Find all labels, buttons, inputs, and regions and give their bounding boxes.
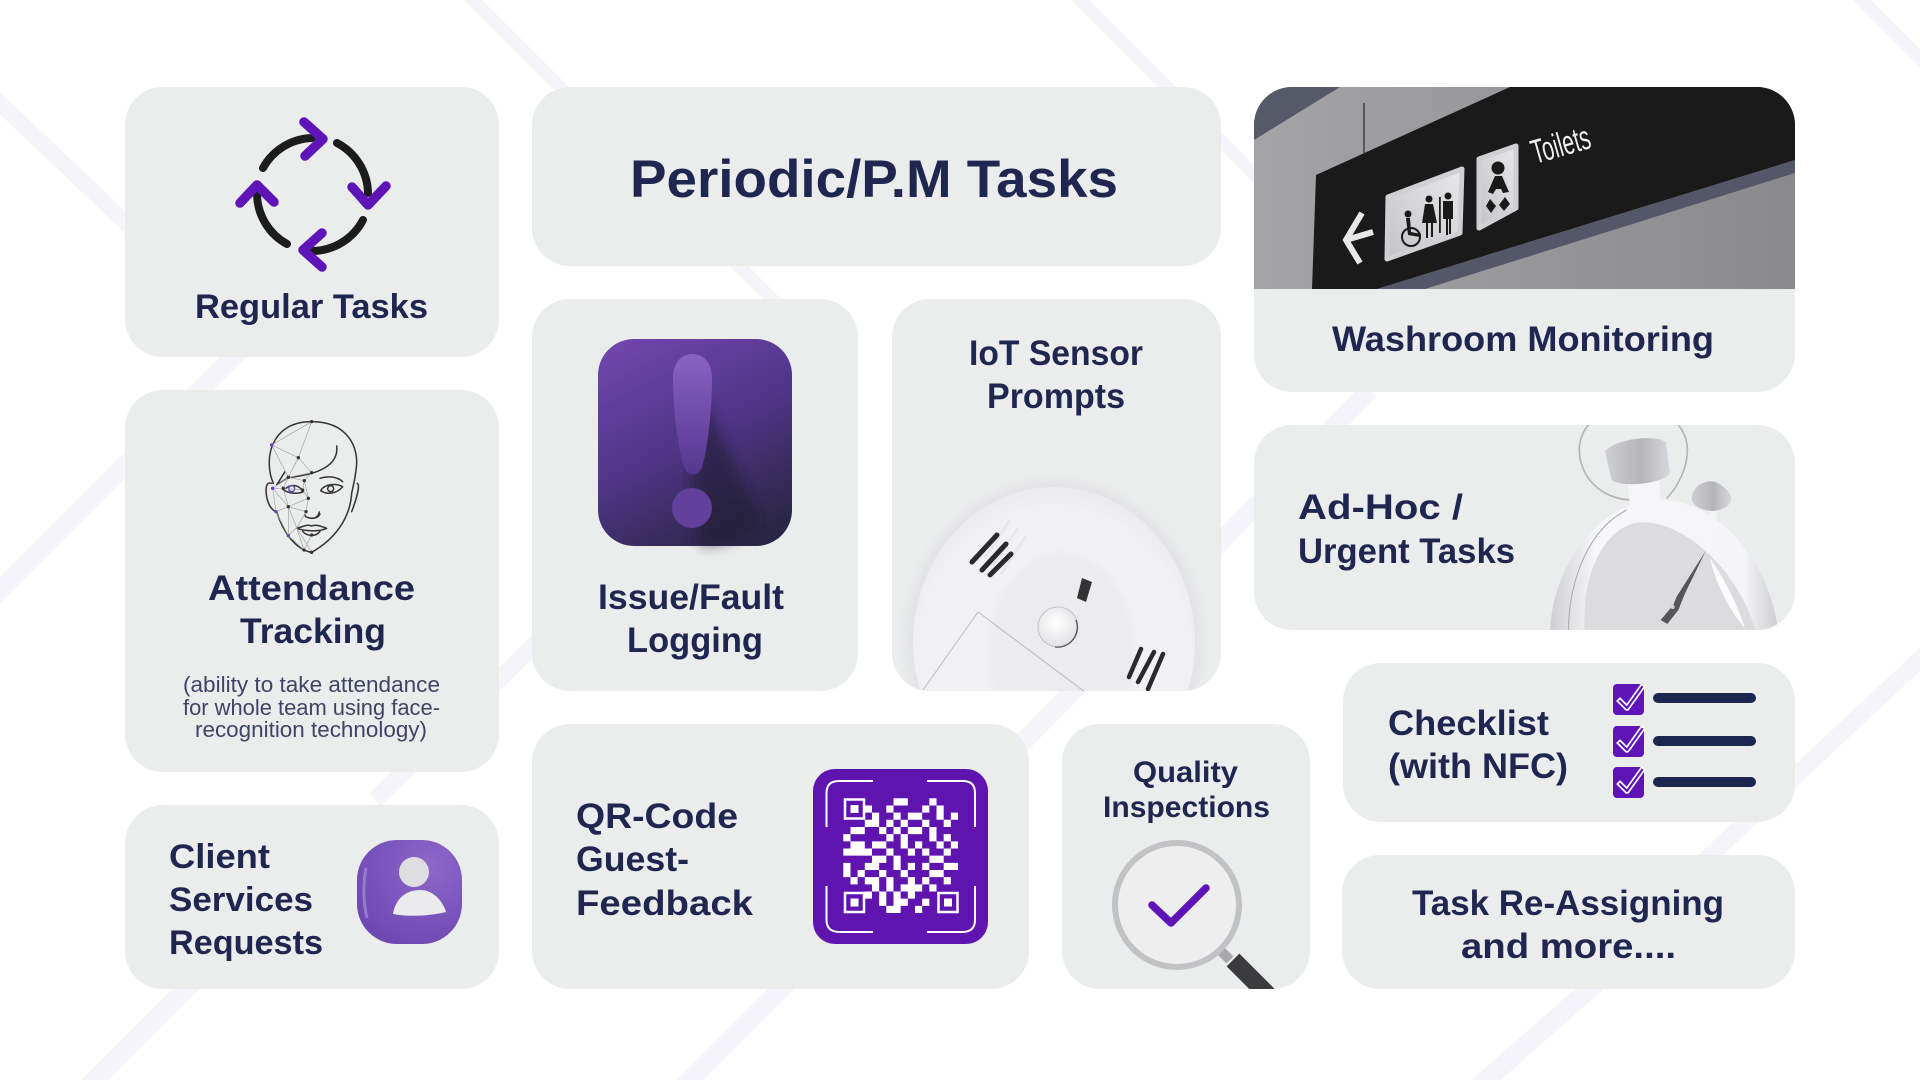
panel: Issue/Fault Logging: [532, 299, 858, 691]
heading: Issue/Fault Logging: Logging: [627, 621, 763, 660]
heading: Ad-Hoc / Urgent Tasks: Ad-Hoc /: [1298, 488, 1463, 527]
text: Task Re-Assigning and more: [1412, 884, 1724, 966]
icon: magnifier with check: [1115, 843, 1268, 995]
heading: IoT Sensor Prompts: [969, 334, 1143, 416]
heading: Washroom Monitoring: Washroom Monitoring: [1332, 320, 1714, 359]
text: QR-Code Guest-Feedback: Feedback: [576, 884, 754, 923]
text: attendance description: for whole team using face-: [183, 695, 440, 720]
panel: Client Services Requests: [125, 805, 499, 989]
heading: Quality Inspections: Quality: [1133, 756, 1238, 789]
heading: Attendance Tracking: Tracking: [240, 612, 386, 651]
heading: Issue/Fault Logging: Issue/Fault: [598, 578, 784, 617]
panel: Washroom Monitoring: [1254, 87, 1795, 392]
heading: Ad-Hoc / Urgent Tasks: [1298, 488, 1515, 571]
text: Task Re-Assigning and more: and more....: [1461, 927, 1676, 966]
heading: Quality Inspections: [1103, 756, 1270, 824]
panel: Quality Inspections: [1062, 724, 1310, 995]
text: QR-Code Guest-Feedback: QR-Code: [576, 797, 738, 836]
photo: toilets sign: [1254, 87, 1795, 289]
icon: checklist: [1613, 684, 1756, 798]
text: attendance description: [183, 672, 440, 742]
panel: Regular Tasks: [125, 87, 499, 357]
panel: Ad-Hoc / Urgent Tasks: [1254, 425, 1795, 630]
heading: IoT Sensor Prompts: IoT Sensor: [969, 334, 1143, 373]
text: Client Services Requests: Client: [169, 838, 270, 876]
heading: Issue/Fault Logging: [598, 578, 784, 660]
icon: accessible, women, men panel: [1387, 169, 1462, 259]
icon: exclamation badge: [598, 339, 792, 546]
text: Client Services Requests: Requests: [169, 924, 323, 962]
text: Checklist (with NFC): (with NFC): [1388, 747, 1568, 786]
icon: face recognition: [266, 420, 358, 554]
heading: IoT Sensor Prompts: Prompts: [987, 377, 1125, 416]
icon: QR code: [813, 769, 988, 944]
icon: baby changing panel: [1479, 146, 1516, 228]
text: QR-Code Guest-Feedback: Guest-: [576, 840, 689, 879]
panel: Attendance Tracking: [125, 390, 499, 772]
illustration: stopwatch: [1550, 425, 1777, 630]
text: Checklist (with NFC): [1388, 704, 1568, 786]
heading: Attendance Tracking: Attendance: [208, 569, 415, 608]
text: Client Services Requests: Services: [169, 881, 313, 919]
sign text: Toilets: Toilets: [1527, 119, 1595, 172]
title: Periodic/P.M Tasks: [630, 150, 1118, 209]
heading: Quality Inspections: Inspections: [1103, 791, 1270, 824]
panel: Task Re-Assigning and more: [1342, 855, 1795, 989]
icon: purple user badge: [357, 840, 462, 944]
panel: QR-Code Guest-Feedback: [532, 724, 1029, 989]
text: Client Services Requests: [169, 838, 323, 962]
illustration: smoke detector: [912, 532, 1196, 691]
panel: Checklist (with NFC): [1343, 663, 1795, 822]
panel: IoT Sensor Prompts: [892, 299, 1221, 691]
text: attendance description: (ability to take attendance: [183, 672, 440, 697]
panel: Periodic/P.M Tasks heading card: [532, 87, 1221, 266]
icon: circular arrows: [240, 122, 386, 267]
text: attendance description: recognition technology): [195, 717, 427, 742]
heading: Ad-Hoc / Urgent Tasks: Urgent Tasks: [1298, 532, 1515, 571]
text: QR-Code Guest-Feedback: [576, 797, 754, 923]
text: Checklist (with NFC): Checklist: [1388, 704, 1549, 743]
heading: Attendance Tracking: [208, 569, 415, 651]
text: Task Re-Assigning and more: Task Re-Assigning: [1412, 884, 1724, 923]
heading: Regular Tasks: Regular Tasks: [195, 288, 428, 326]
